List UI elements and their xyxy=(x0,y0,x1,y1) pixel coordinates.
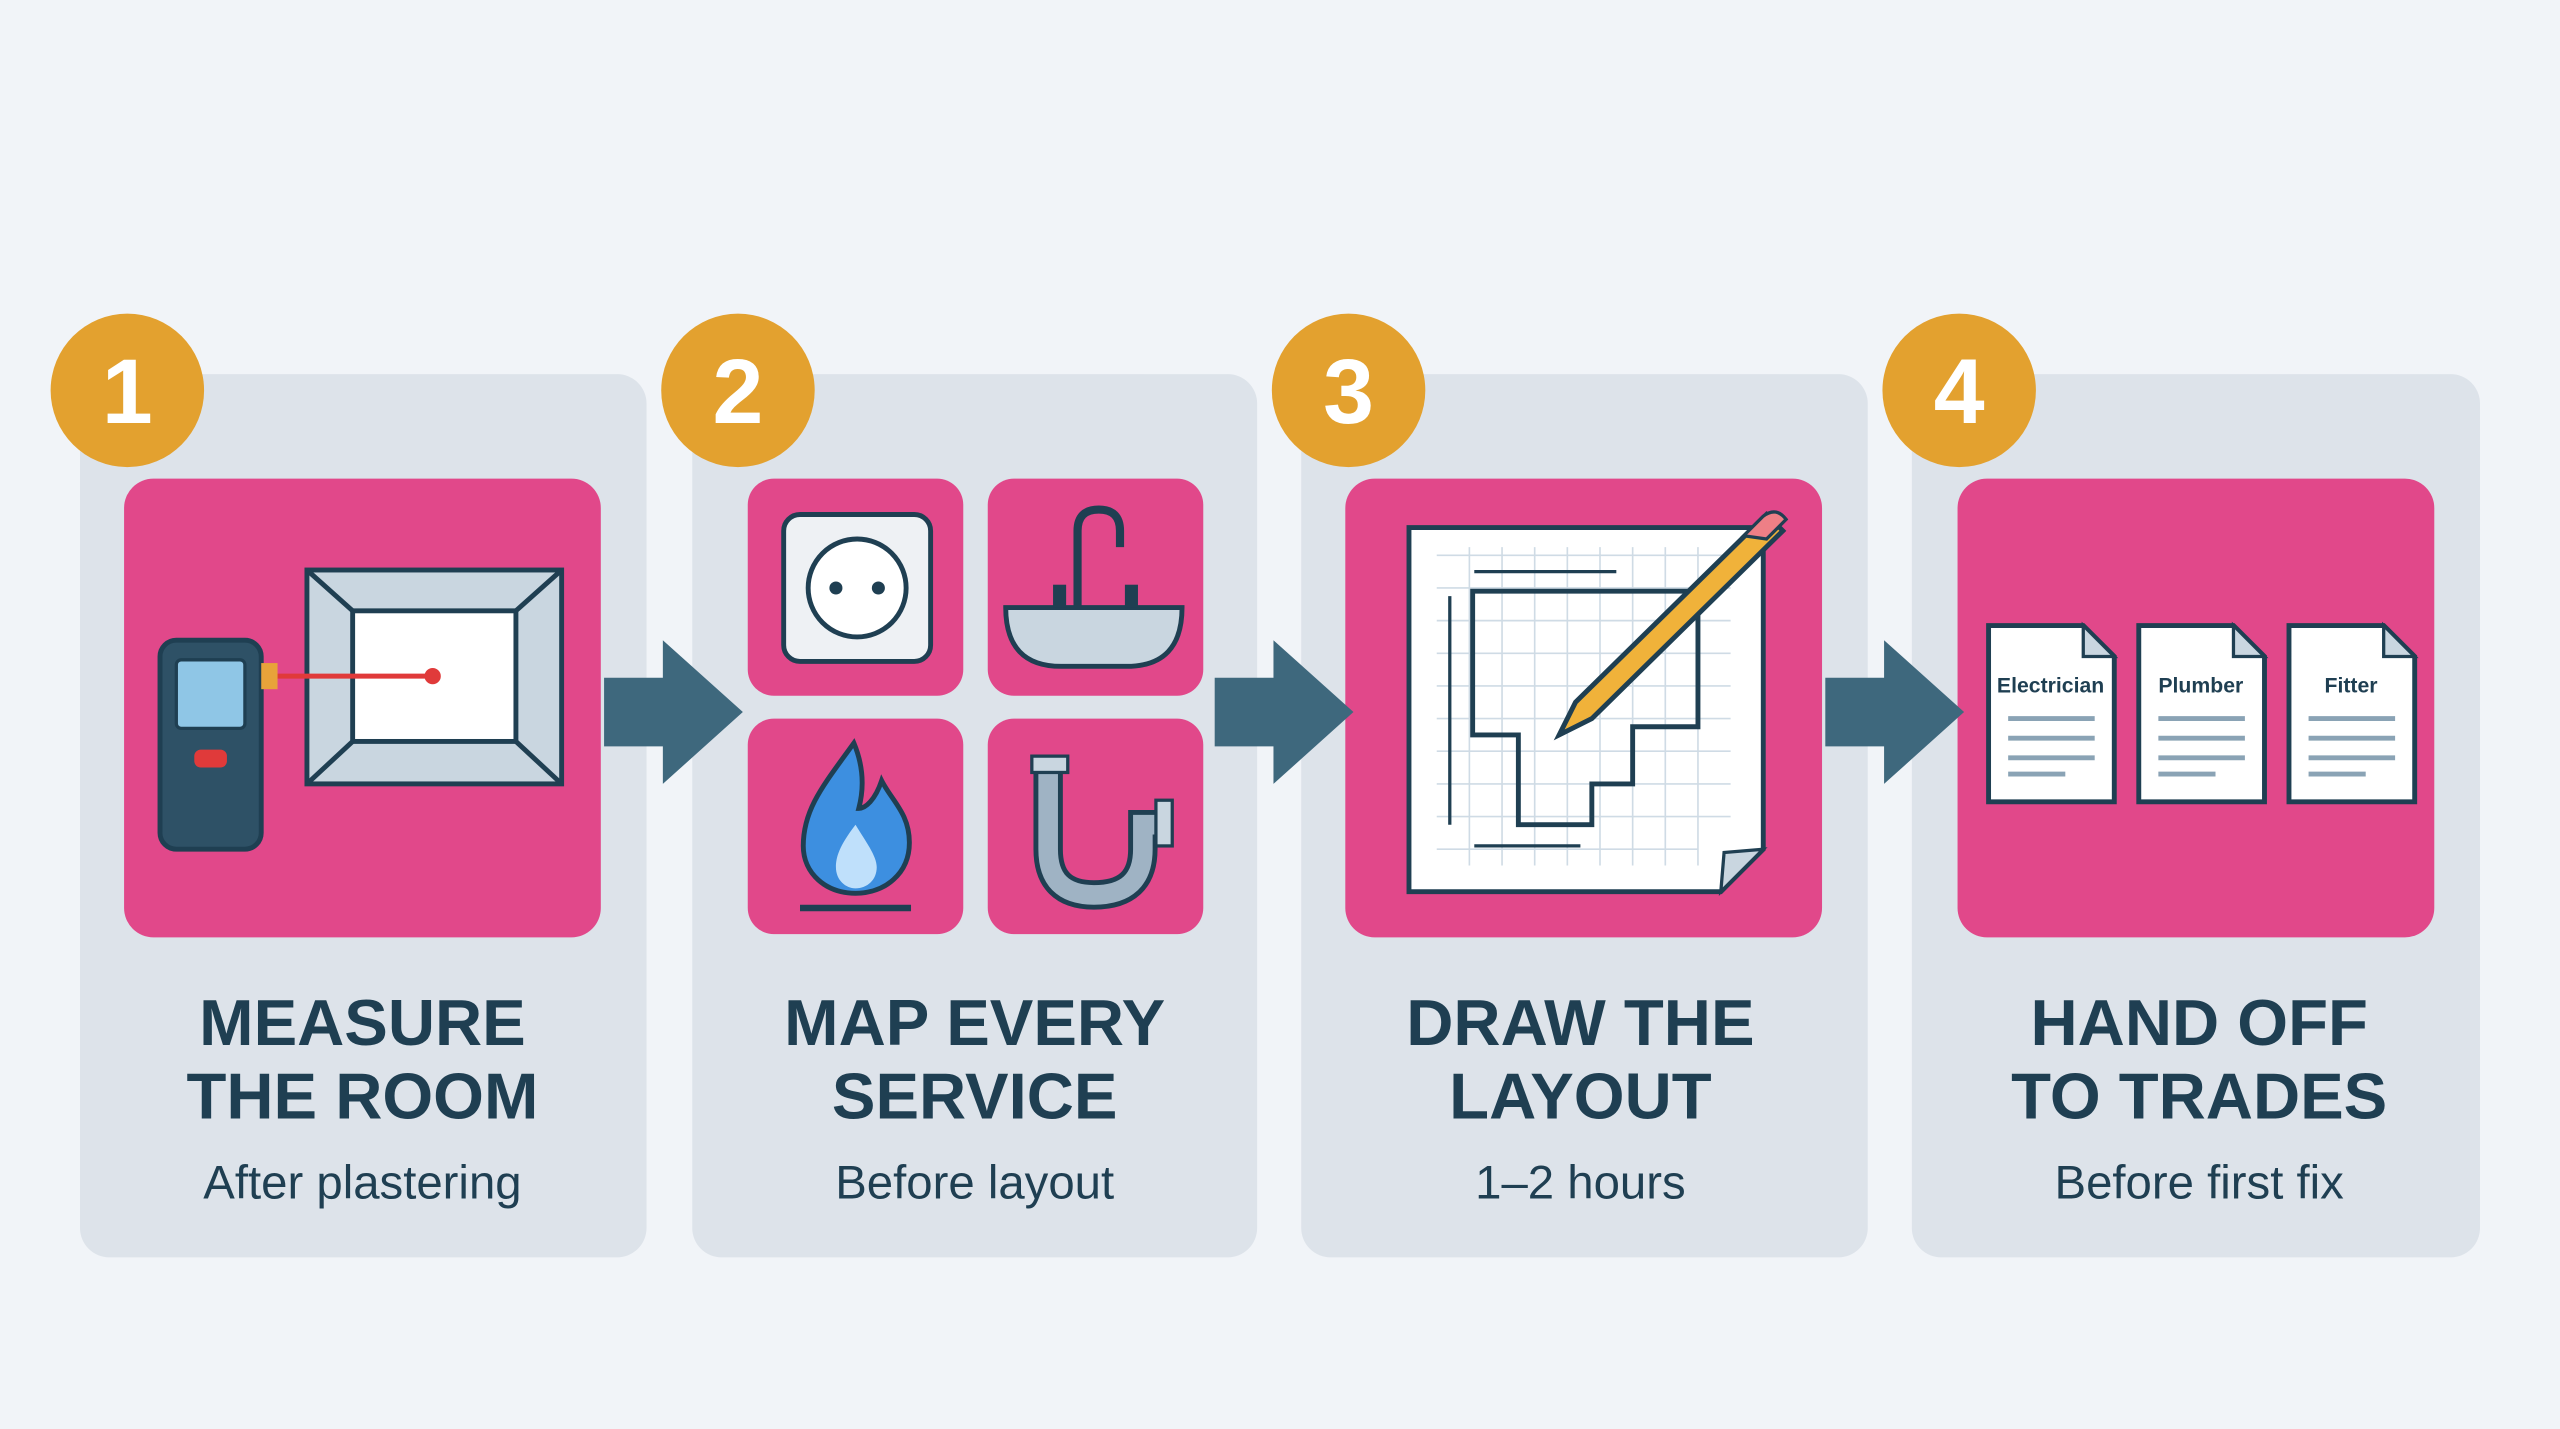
panel: step 1 measure xyxy=(80,374,647,1257)
subtitle: After plastering xyxy=(203,1157,522,1210)
badge 1: 1 xyxy=(102,341,153,443)
panel: step 2 map services xyxy=(692,374,1257,1257)
subtitle: Before first fix xyxy=(2055,1157,2344,1210)
panel: step 3 draw layout xyxy=(1301,374,1868,1257)
icon panel: laser measure xyxy=(124,479,601,937)
icon panel: plan drawing xyxy=(1345,479,1822,937)
heading: hand off to trades: HAND OFF xyxy=(2031,986,2368,1059)
badge 2 xyxy=(661,314,815,467)
icon: sink xyxy=(988,479,1203,696)
badge 2: 2 xyxy=(713,341,763,443)
arrow 1 xyxy=(604,640,743,784)
badge 3: 3 xyxy=(1323,341,1374,443)
panel: step 4 hand off: TO TRADES xyxy=(2011,1060,2387,1133)
panel: step 2 map services: SERVICE xyxy=(832,1060,1117,1133)
badge 4 xyxy=(1882,314,2036,467)
icon: socket xyxy=(748,479,963,696)
arrow 3 xyxy=(1825,640,1964,784)
icon: pipe trap xyxy=(988,719,1203,934)
heading: draw the layout: DRAW THE xyxy=(1406,986,1755,1059)
subtitle: Before layout xyxy=(835,1157,1114,1210)
panel: step 4 hand off xyxy=(1912,374,2480,1257)
icon panel: documents: Fitter xyxy=(2324,674,2378,697)
icon: gas flame xyxy=(748,719,963,934)
panel: step 3 draw layout: LAYOUT xyxy=(1449,1060,1712,1133)
subtitle: 1–2 hours xyxy=(1475,1157,1686,1210)
heading: measure the room: MEASURE xyxy=(199,986,526,1059)
panel: step 1 measure: THE ROOM xyxy=(187,1060,538,1133)
heading: map every service: MAP EVERY xyxy=(784,986,1165,1059)
icon panel: documents: Plumber xyxy=(2158,674,2243,697)
icon panel: documents: Electrician xyxy=(1997,674,2104,697)
icon panel: documents xyxy=(1958,479,2434,937)
badge 4: 4 xyxy=(1934,341,1985,443)
badge 3 xyxy=(1272,314,1425,467)
arrow 2 xyxy=(1215,640,1353,784)
badge 1 xyxy=(51,314,204,467)
